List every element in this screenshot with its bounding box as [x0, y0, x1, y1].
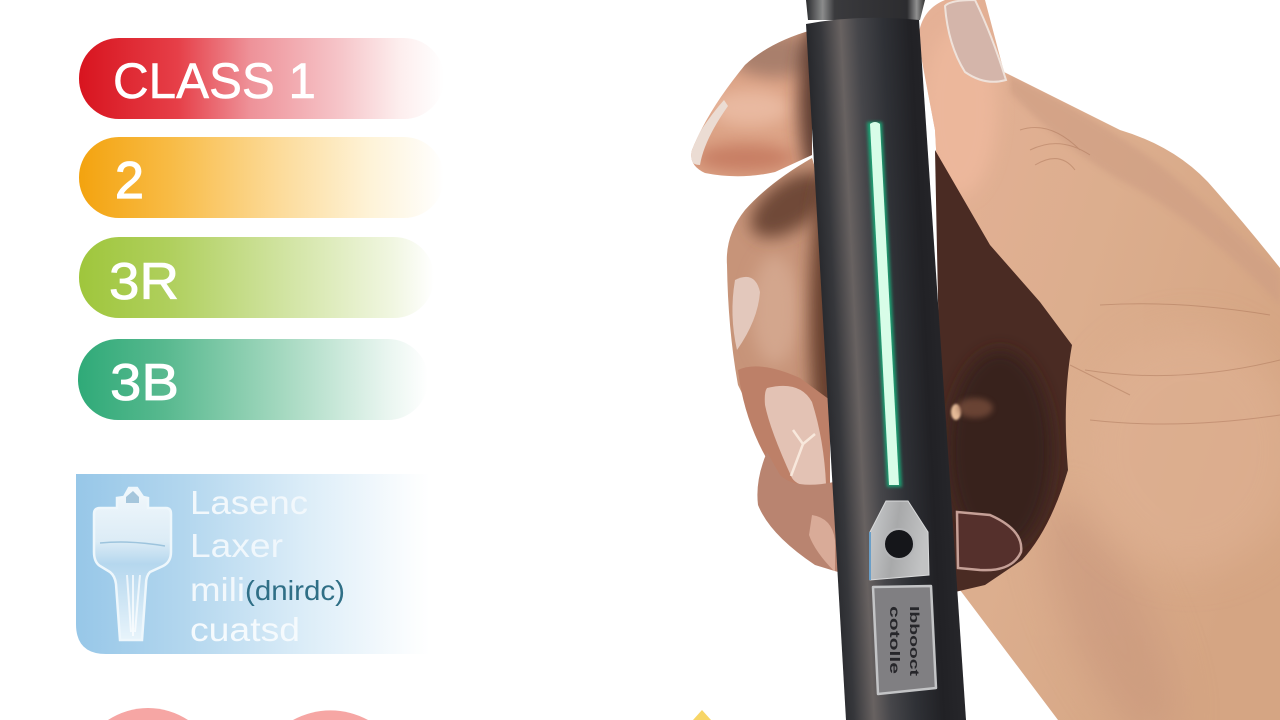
class 3R pill: 3R	[109, 253, 179, 311]
green indicator	[867, 122, 902, 487]
text lines: cuatsd	[190, 611, 300, 648]
pen cap	[806, 0, 925, 20]
class 3B pill	[78, 339, 428, 420]
panel: laser info	[76, 474, 430, 654]
label plate: Ibbooct	[907, 606, 922, 677]
class 1 pill: CLASS 1	[113, 53, 316, 109]
class 3B pill: 3B	[110, 354, 179, 412]
text lines: Laxer	[190, 527, 283, 564]
icon: laser device	[94, 488, 171, 640]
icon: cut-off warning triangle	[693, 710, 711, 720]
button plate	[870, 501, 929, 580]
finger 4	[757, 456, 838, 572]
text lines: mili	[190, 571, 245, 608]
palm and thumb	[915, 0, 1280, 720]
label plate: cotolle	[887, 606, 903, 674]
text lines: (dnirdc)	[245, 575, 345, 606]
icon: cut-off red circles	[108, 708, 368, 720]
laser pen	[806, 0, 966, 720]
class 3R pill	[79, 237, 434, 318]
thumbnail	[945, 0, 1006, 82]
text lines: Lasenc	[190, 484, 308, 521]
dark fingertip nail	[957, 512, 1021, 570]
finger 3	[738, 366, 830, 485]
pen body	[806, 18, 966, 720]
hand	[685, 0, 1280, 720]
finger 1	[691, 32, 812, 176]
text lines	[190, 484, 345, 648]
class 2 pill: 2	[115, 152, 144, 210]
class 2 pill	[79, 137, 444, 218]
dark inner palm	[935, 150, 1072, 592]
class 1 pill	[79, 38, 444, 119]
knuckle wrinkles	[1020, 128, 1280, 424]
label plate	[873, 586, 936, 694]
finger 2	[726, 158, 828, 398]
